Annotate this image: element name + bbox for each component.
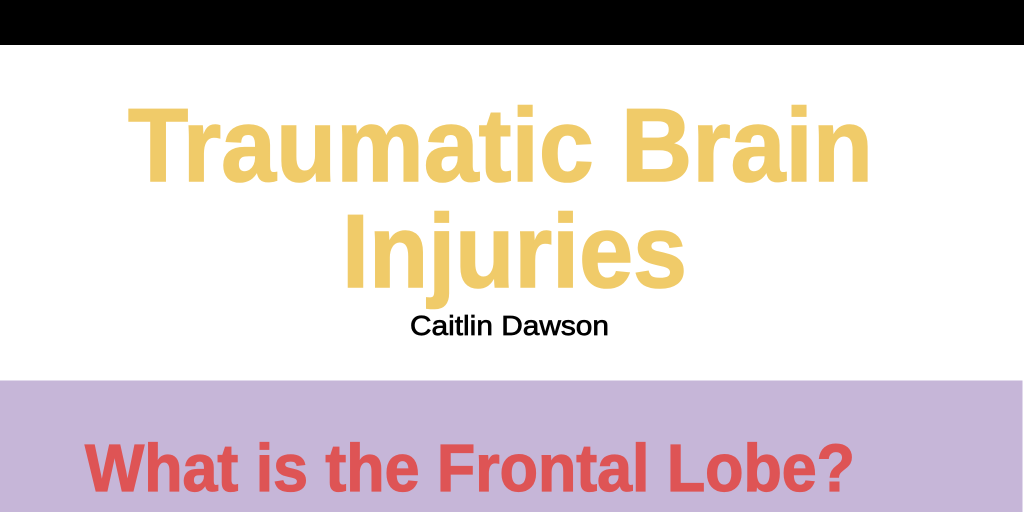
top black band — [0, 0, 1024, 45]
panel background — [0, 380, 1022, 512]
title — [128, 88, 873, 310]
author name: Caitlin Dawson — [410, 310, 609, 341]
section heading: What is the Frontal Lobe? — [85, 431, 855, 506]
panel: frontal lobe section — [0, 380, 1022, 512]
title: Injuries — [342, 194, 687, 310]
title: Traumatic Brain — [128, 88, 873, 204]
